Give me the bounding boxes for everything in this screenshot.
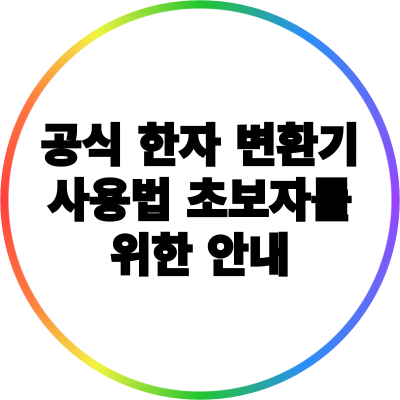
title: 위한 안내 — [110, 230, 290, 281]
title: 공식 한자 변환기 — [41, 120, 359, 171]
title: 사용법 초보자를 — [48, 175, 352, 226]
